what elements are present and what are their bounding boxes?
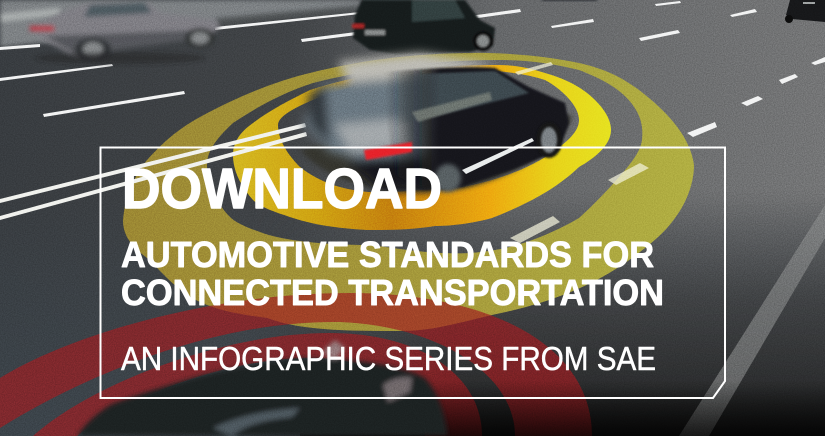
front wheel	[536, 122, 562, 158]
subheading: automotive standards for connected transportation: CONNECTED TRANSPORTATION	[121, 272, 664, 313]
lane dashes showing through rings	[510, 62, 649, 243]
yellow detection rings around car	[123, 53, 694, 331]
rear wheel	[435, 164, 461, 192]
blurred car far top	[542, 0, 597, 1]
car body	[385, 67, 569, 190]
road lane markings	[0, 1, 825, 137]
double solid lane lines	[0, 123, 307, 220]
blurred silver car top left	[30, 3, 220, 64]
tail light	[364, 142, 412, 160]
black car top right	[785, 0, 825, 23]
window reflections	[412, 92, 492, 122]
road solid edge line	[679, 205, 825, 436]
subheading: automotive standards for connected transportation	[121, 234, 664, 313]
chrome stripe	[462, 138, 534, 174]
black car top centre	[352, 0, 495, 54]
car shadow	[300, 115, 572, 192]
white frame with clipped corner	[100, 148, 725, 398]
side window	[395, 71, 529, 125]
blurred dark car at bottom	[77, 340, 448, 436]
outer yellow ring	[123, 53, 694, 331]
inner red ring	[33, 333, 482, 436]
dark fade along the bottom edge	[300, 380, 825, 436]
blurred rear of car	[303, 53, 495, 190]
tagline: an infographic series from sae: AN INFOGRAPHIC SERIES FROM SAE	[121, 340, 656, 377]
inner yellow ring	[233, 65, 611, 230]
red detection rings around rear car	[0, 293, 592, 436]
subheading: automotive standards for connected transportation: AUTOMOTIVE STANDARDS FOR	[121, 234, 654, 275]
roadside guard rail	[0, 0, 360, 47]
outer red ring	[0, 293, 592, 436]
heading: download: DOWNLOAD	[122, 157, 442, 221]
main black SUV	[300, 53, 572, 192]
